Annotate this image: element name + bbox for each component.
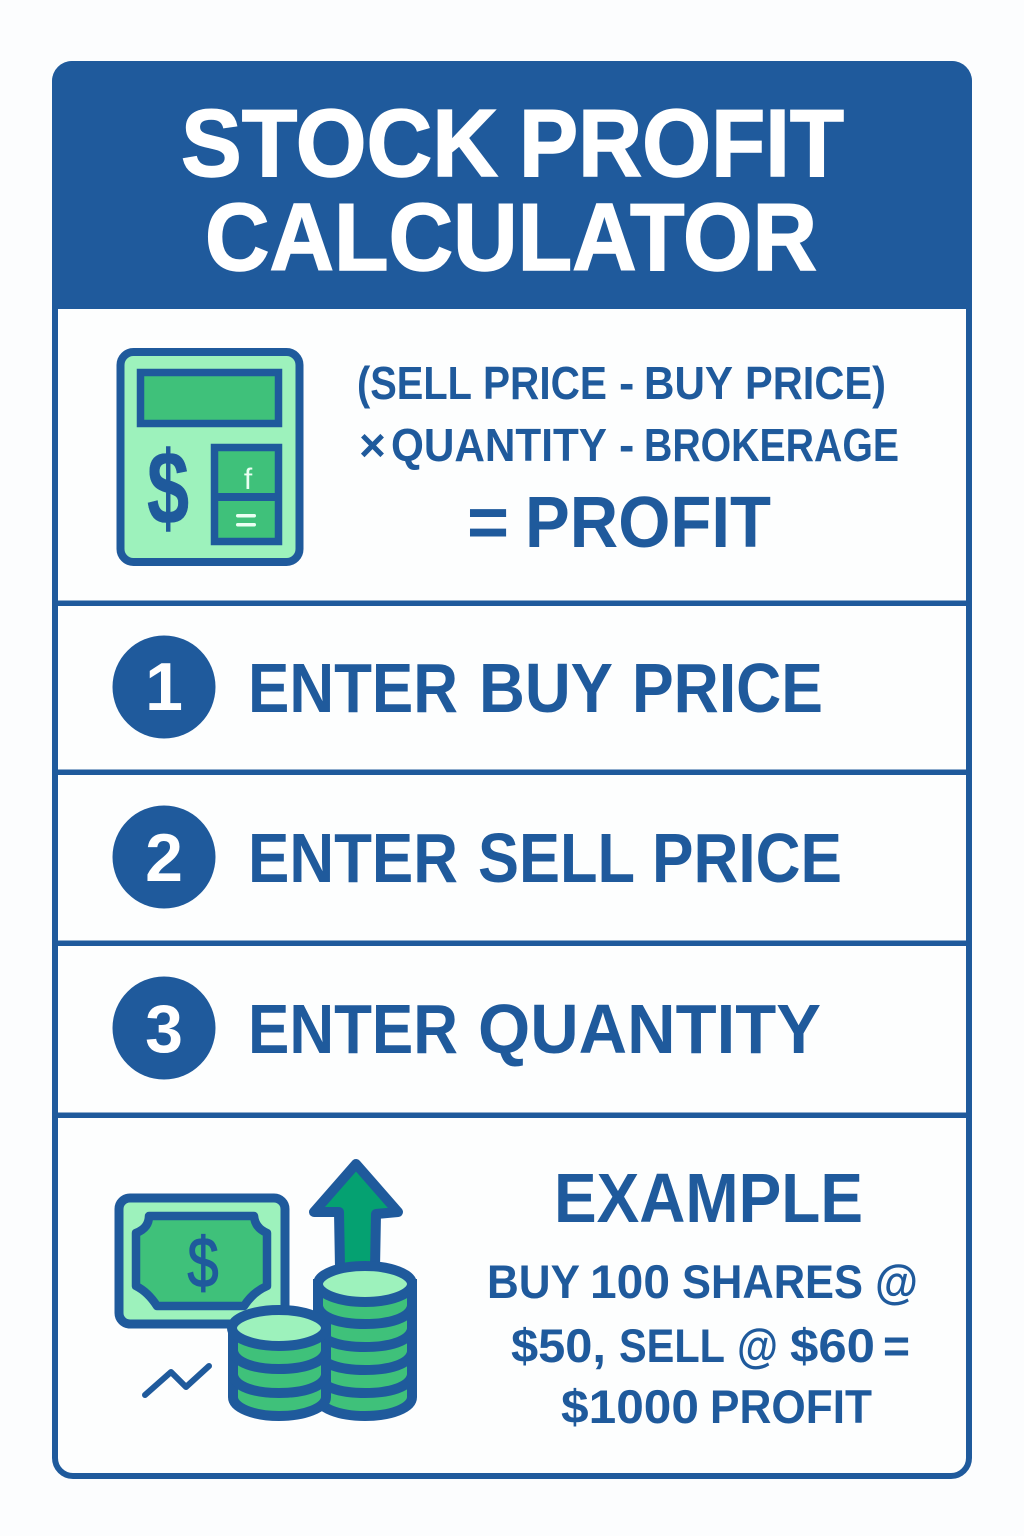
step 1: BUY bbox=[479, 649, 613, 727]
example text: 100 bbox=[590, 1255, 670, 1308]
icon: left coin stack bbox=[232, 1310, 326, 1416]
formula text: PRICE) bbox=[745, 357, 886, 409]
formula text: QUANTITY bbox=[391, 419, 607, 471]
example text: = bbox=[883, 1319, 910, 1372]
example text: SELL bbox=[619, 1319, 725, 1372]
step 3: QUANTITY bbox=[478, 990, 821, 1068]
step 1: ENTER bbox=[248, 649, 458, 727]
step 2: PRICE bbox=[652, 819, 842, 897]
formula text: = bbox=[467, 483, 509, 563]
example heading: EXAMPLE bbox=[554, 1159, 863, 1237]
step 2 bbox=[112, 806, 842, 908]
title: STOCK bbox=[181, 90, 498, 197]
example text: $50, bbox=[511, 1319, 606, 1372]
formula text: - bbox=[619, 419, 634, 471]
icon: right coin stack bbox=[318, 1266, 412, 1416]
step 3: 3 bbox=[145, 991, 183, 1067]
title: CALCULATOR bbox=[205, 184, 817, 291]
formula text bbox=[357, 357, 899, 563]
formula text: PROFIT bbox=[525, 483, 771, 563]
icon: calculator: f bbox=[244, 463, 253, 496]
example text: @ bbox=[875, 1255, 918, 1308]
icon: calculator bbox=[120, 352, 300, 562]
example text: BUY bbox=[487, 1255, 580, 1308]
step 1: 1 bbox=[145, 649, 183, 725]
step 3 bbox=[112, 976, 821, 1080]
title bbox=[181, 90, 844, 291]
step 1 bbox=[112, 636, 823, 738]
icon: calculator: $ bbox=[147, 431, 189, 547]
formula text: BROKERAGE bbox=[644, 419, 899, 471]
step 2: 2 bbox=[145, 820, 183, 896]
icon: up arrow bbox=[314, 1164, 398, 1268]
formula text: × bbox=[359, 419, 386, 471]
step 1: PRICE bbox=[632, 649, 823, 727]
icon: banknote: $ bbox=[187, 1224, 219, 1303]
example text: $1000 bbox=[561, 1380, 699, 1433]
example text: PROFIT bbox=[710, 1380, 872, 1433]
example text: @ bbox=[737, 1319, 778, 1372]
formula text: BUY bbox=[644, 357, 733, 409]
example text: $60 bbox=[790, 1319, 875, 1372]
header banner bbox=[52, 61, 972, 309]
formula text: PRICE bbox=[483, 357, 607, 409]
icon: trend line bbox=[145, 1366, 209, 1395]
icon: banknote bbox=[119, 1198, 285, 1324]
formula text: - bbox=[619, 357, 634, 409]
step 2: ENTER bbox=[248, 819, 458, 897]
example text bbox=[487, 1255, 918, 1433]
icon: money, coins and up arrow bbox=[119, 1164, 412, 1416]
title: PROFIT bbox=[519, 90, 844, 197]
formula text: (SELL bbox=[357, 357, 472, 409]
example text: SHARES bbox=[682, 1255, 863, 1308]
step 3: ENTER bbox=[248, 990, 458, 1068]
step 2: SELL bbox=[478, 819, 635, 897]
